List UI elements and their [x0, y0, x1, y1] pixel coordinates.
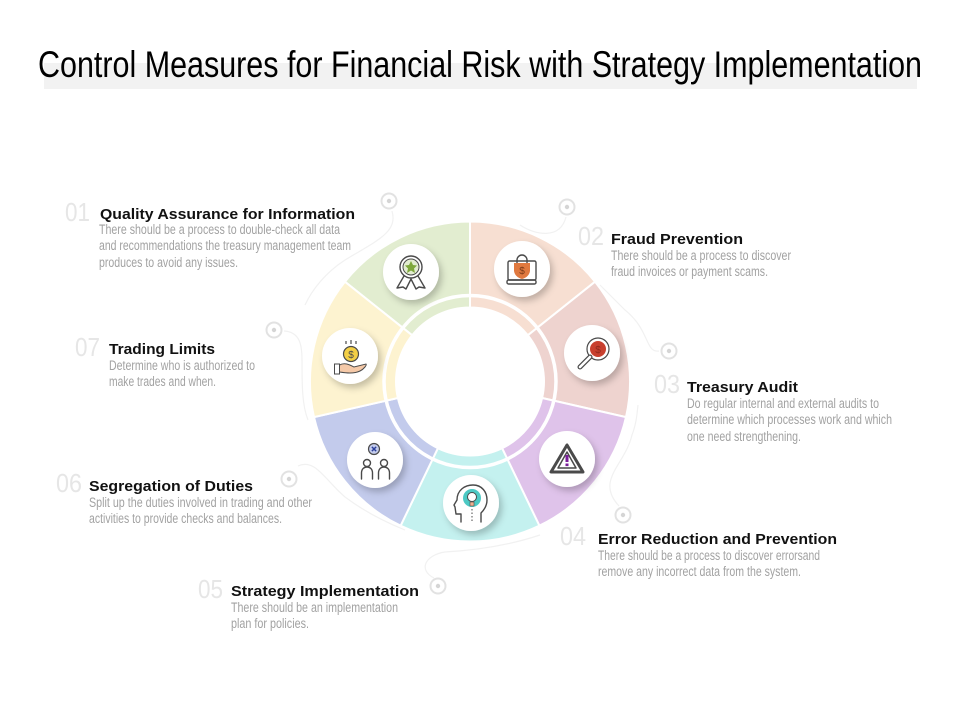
text block 03: Do regular internal and external audits to [687, 396, 879, 411]
text block 04: 04 [560, 521, 586, 551]
text block 01: There should be a process to double-check all data [99, 222, 340, 237]
icon: hand with coin [322, 328, 378, 384]
segment 02 peach [470, 221, 595, 335]
text block 06 [56, 468, 312, 526]
text block 04: Error Reduction and Prevention [598, 532, 837, 548]
text block 06: 06 [56, 468, 82, 498]
text block 01: 01 [65, 197, 90, 227]
icon: magnifier: $ [595, 345, 601, 356]
icon: magnifier [564, 325, 620, 381]
title underline bar [44, 63, 917, 89]
segment 04 purple [502, 398, 626, 526]
text block 04: There should be a process to discover errorsand [598, 548, 820, 563]
icon: laptop lock shield: $ [519, 266, 525, 277]
text block 05: 05 [198, 574, 223, 604]
text block 03: Treasury Audit [687, 380, 798, 396]
text block 05: Strategy Implementation [231, 584, 419, 600]
segment 03 pink [528, 282, 630, 417]
icon: warning triangle [539, 431, 595, 487]
segment 06 blue [314, 398, 438, 526]
text block 06: Segregation of Duties [89, 479, 253, 495]
text block 02: 02 [578, 221, 604, 251]
icon: two people with x bubble [347, 432, 403, 488]
text block 03: determine which processes work and which [687, 412, 892, 427]
text block 03: one need strengthening. [687, 429, 801, 444]
icon: laptop lock shield [494, 241, 550, 297]
text block 06: activities to provide checks and balances. [89, 511, 282, 526]
text block 04 [560, 521, 837, 579]
segment 05 cyan [401, 448, 539, 542]
text block 02: There should be a process to discover [611, 248, 791, 263]
text block 05: There should be an implementation [231, 600, 398, 615]
text block 05 [198, 574, 419, 631]
text block 03 [654, 369, 892, 444]
segment 01 green [345, 222, 470, 335]
text block 03: 03 [654, 369, 680, 399]
text block 01: and recommendations the treasury management team [99, 238, 351, 253]
text block 01 [65, 197, 355, 270]
segment 07 yellow [310, 282, 412, 417]
icon: hand with coin: $ [348, 350, 354, 361]
icon: head with lightbulb [443, 475, 499, 531]
text block 07 [75, 332, 255, 389]
text block 01: Quality Assurance for Information [100, 207, 355, 223]
text block 07: 07 [75, 332, 100, 362]
text block 06: Split up the duties involved in trading and other [89, 495, 312, 510]
text block 02 [578, 221, 791, 279]
text block 02: fraud invoices or payment scams. [611, 264, 768, 279]
text block 07: Trading Limits [109, 342, 215, 358]
text block 07: Determine who is authorized to [109, 358, 255, 373]
text block 02: Fraud Prevention [611, 232, 743, 248]
text block 01: produces to avoid any issues. [99, 255, 238, 270]
connector lines [284, 211, 659, 578]
text block 05: plan for policies. [231, 616, 309, 631]
white separator ring [384, 296, 556, 468]
target markers [266, 194, 676, 594]
text block 04: remove any incorrect data from the system. [598, 564, 801, 579]
icon: award ribbon [383, 244, 439, 300]
donut chart [310, 221, 630, 542]
text block 07: make trades and when. [109, 374, 216, 389]
